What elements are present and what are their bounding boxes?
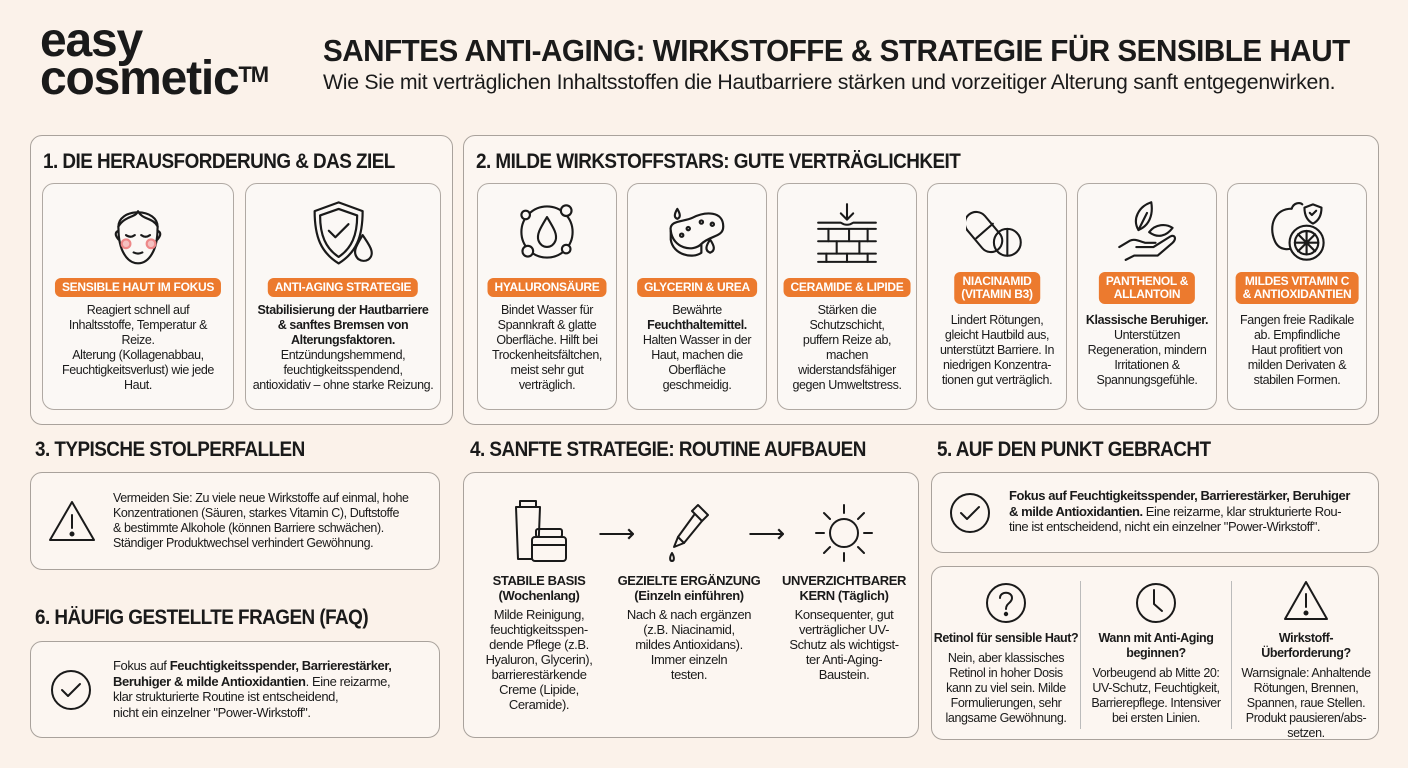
text: [253, 303, 433, 392]
step 1: Hyaluron, Glycerin),: [486, 652, 592, 667]
text: Alterungsfaktoren.: [291, 333, 395, 347]
step 2: [618, 504, 760, 682]
panel: wirkstoffstars: [463, 135, 1379, 425]
text: [1240, 313, 1354, 387]
text: [1086, 313, 1208, 387]
badge: SENSIBLE HAUT IM FOKUS: [62, 280, 214, 294]
faq 3: Rötungen, Brennen,: [1254, 681, 1358, 695]
faq 3: Warnsignale: Anhaltende: [1241, 666, 1371, 680]
faq 2: beginnen?: [1126, 646, 1186, 660]
card: hyaluronsäure: [477, 183, 617, 410]
heading 1: 1. DIE HERAUSFORDERUNG & DAS ZIEL: [43, 150, 395, 173]
icon: hand with leaf: [1118, 201, 1176, 261]
text: Lindert Rötungen,: [951, 313, 1043, 327]
text: Fokus auf Feuchtigkeitsspender, Barrierestärker,: [113, 658, 392, 673]
text: meist sehr gut: [511, 363, 583, 377]
faq 3: [1241, 581, 1371, 740]
faq 1: Retinol in hoher Dosis: [949, 666, 1063, 680]
text: Bindet Wasser für: [501, 303, 593, 317]
panel: faq summary: [30, 641, 440, 738]
text: & bestimmte Alkohole (können Barriere schwächen).: [113, 521, 384, 535]
text: [643, 303, 752, 392]
text: tine ist entscheidend, nicht ein einzelner "Power-Wirkstoff".: [1009, 519, 1320, 534]
text: verträglich.: [519, 378, 575, 392]
faq 2: Wann mit Anti-Aging: [1098, 631, 1214, 645]
step 3: Baustein.: [819, 667, 869, 682]
faq 1: Formulierungen, sehr: [951, 696, 1061, 710]
panel: summary: [931, 472, 1379, 553]
title: SANFTES ANTI-AGING: WIRKSTOFFE & STRATEGIE FÜR SENSIBLE HAUT: [323, 33, 1350, 68]
text: Stärken die: [818, 303, 876, 317]
panel: routine: [463, 472, 919, 738]
badge: (VITAMIN B3): [961, 287, 1033, 301]
subtitle: Wie Sie mit verträglichen Inhaltsstoffen die Hautbarriere stärken und vorzeitiger Alterung sanft entgegenwirken.: [323, 70, 1335, 94]
icon: dropper: [669, 504, 709, 562]
text: widerstandsfähiger: [798, 363, 896, 377]
text: Fokus auf Feuchtigkeitsspender, Barrierestärker, Beruhiger: [1009, 488, 1350, 503]
text: & sanftes Bremsen von: [278, 318, 408, 332]
step 2: mildes Antioxidans).: [635, 637, 743, 652]
icon: pills: [966, 210, 1022, 257]
text: machen: [826, 348, 868, 362]
text: Haut, machen die: [651, 348, 743, 362]
text: puffern Reize ab,: [803, 333, 891, 347]
text: Entzündungshemmend,: [281, 348, 405, 362]
faq 3: Wirkstoff-: [1279, 631, 1333, 645]
faq 3: Produkt pausieren/abs-: [1246, 711, 1366, 725]
text: Stabilisierung der Hautbarriere: [258, 303, 428, 317]
text: [493, 573, 586, 603]
text: GEZIELTE ERGÄNZUNG: [618, 573, 760, 588]
heading 4: 4. SANFTE STRATEGIE: ROUTINE AUFBAUEN: [470, 438, 866, 461]
heading 6: 6. HÄUFIG GESTELLTE FRAGEN (FAQ): [35, 606, 368, 629]
step 1: [486, 500, 592, 712]
icon: check circle: [51, 670, 91, 710]
text: stabilen Formen.: [1254, 373, 1340, 387]
step 3: [782, 504, 906, 682]
icon: warning: [1284, 581, 1328, 620]
step 3: Konsequenter, gut: [795, 607, 893, 622]
text: nicht ein einzelner "Power-Wirkstoff".: [113, 704, 311, 720]
icon: molecule drop: [520, 204, 574, 259]
heading 2: 2. MILDE WIRKSTOFFSTARS: GUTE VERTRÄGLICHKEIT: [476, 150, 960, 173]
text: Haut profitiert von: [1251, 343, 1343, 357]
faq 1: Retinol für sensible Haut?: [934, 631, 1078, 645]
text: tionen gut verträglich.: [942, 373, 1052, 387]
text: [113, 658, 392, 720]
step 3: ter Anti-Aging-: [806, 652, 882, 667]
faq 1: [934, 583, 1078, 725]
step 2: Immer einzeln: [651, 652, 727, 667]
text: Oberfläche: [668, 363, 726, 377]
text: Feuchthaltemittel.: [647, 318, 747, 332]
heading 5: 5. AUF DEN PUNKT GEBRACHT: [937, 438, 1211, 461]
icon: sponge: [669, 208, 724, 257]
badge: PANTHENOL &: [1106, 274, 1188, 288]
badge: NIACINAMID: [962, 274, 1031, 288]
badge: ANTI-AGING STRATEGIE: [275, 280, 411, 294]
faq 2: Vorbeugend ab Mitte 20:: [1092, 666, 1220, 680]
text: Vermeiden Sie: Zu viele neue Wirkstoffe auf einmal, hohe: [113, 491, 409, 505]
text: Alterung (Kollagenabbau,: [72, 348, 204, 362]
step 1: Creme (Lipide,: [499, 682, 579, 697]
step 1: feuchtigkeitsspen-: [490, 622, 588, 637]
badge: [268, 278, 418, 297]
text: Ständiger Produktwechsel verhindert Gewöhnung.: [113, 536, 373, 550]
arrow: ⟶: [748, 518, 785, 548]
text: Fangen freie Radikale: [1240, 313, 1354, 327]
badge: [637, 278, 757, 297]
panel: stolperfallen: [30, 472, 440, 570]
icon: warning: [49, 501, 95, 541]
text: niedrigen Konzentra-: [943, 358, 1051, 372]
step 2: (z.B. Niacinamid,: [643, 622, 735, 637]
card: anti-aging strategie: [245, 183, 441, 410]
text: [792, 303, 902, 392]
step 2: testen.: [671, 667, 707, 682]
text: klar strukturierte Routine ist entscheidend,: [113, 689, 338, 704]
text: [1009, 488, 1350, 534]
badge: [1236, 272, 1358, 304]
faq 3: setzen.: [1287, 726, 1325, 740]
faq 1: langsame Gewöhnung.: [946, 711, 1066, 725]
step 3: Schutz als wichtigst-: [789, 637, 899, 652]
text: Inhaltsstoffe, Temperatur &: [69, 318, 207, 332]
text: gleicht Hautbild aus,: [945, 328, 1049, 342]
arrow: ⟶: [598, 518, 635, 548]
faq 2: bei ersten Linien.: [1112, 711, 1200, 725]
text: [618, 573, 760, 603]
text: UNVERZICHTBARER: [782, 573, 906, 588]
step 1: barrierestärkende: [491, 667, 587, 682]
text: Reize.: [121, 333, 155, 347]
badge: [784, 278, 910, 297]
text: Konzentrationen (Säuren, starkes Vitamin C), Duftstoffe: [113, 506, 399, 520]
card: glycerin & urea: [627, 183, 767, 410]
text: Schutzschicht,: [810, 318, 884, 332]
text: STABILE BASIS: [493, 573, 585, 588]
badge: [487, 278, 607, 297]
text: (Wochenlang): [499, 588, 579, 603]
card: niacinamid: [927, 183, 1067, 410]
text: Spannungsgefühle.: [1097, 373, 1197, 387]
icon: clock: [1136, 583, 1176, 623]
faq 2: [1091, 583, 1221, 725]
panel: faq: [931, 566, 1379, 740]
badge: HYALURONSÄURE: [494, 280, 600, 294]
card: panthenol: [1077, 183, 1217, 410]
text: & milde Antioxidantien. Eine reizarme, klar strukturierte Rou-: [1009, 504, 1341, 518]
step 2: Nach & nach ergänzen: [627, 607, 751, 622]
text: geschmeidig.: [663, 378, 731, 392]
card: vitamin c: [1227, 183, 1367, 410]
icon: question: [986, 583, 1026, 623]
icon: check circle: [950, 493, 990, 533]
logo: easy: [40, 14, 142, 67]
faq 2: UV-Schutz, Feuchtigkeit,: [1092, 681, 1220, 695]
text: Unterstützen: [1114, 328, 1180, 342]
panel: challenge and goal: [30, 135, 453, 425]
text: milden Derivaten &: [1248, 358, 1346, 372]
heading 3: 3. TYPISCHE STOLPERFALLEN: [35, 438, 305, 461]
text: Haut.: [124, 378, 152, 392]
text: [782, 573, 906, 603]
faq 2: Barrierepflege. Intensiver: [1091, 696, 1221, 710]
text: Halten Wasser in der: [643, 333, 751, 347]
text: [113, 491, 409, 550]
text: Feuchtigkeitsverlust) wie jede: [62, 363, 214, 377]
text: antioxidativ – ohne starke Reizung.: [253, 378, 433, 392]
step 3: verträglicher UV-: [799, 622, 889, 637]
text: Trockenheitsfältchen,: [492, 348, 602, 362]
text: Irritationen &: [1114, 358, 1180, 372]
faq 3: Spannen, raue Stellen.: [1247, 696, 1365, 710]
badge: & ANTIOXIDANTIEN: [1243, 287, 1351, 301]
step 1: dende Pflege (z.B.: [489, 637, 589, 652]
text: Regeneration, mindern: [1088, 343, 1206, 357]
text: [62, 303, 214, 392]
faq 3: Überforderung?: [1261, 646, 1351, 660]
text: Reagiert schnell auf: [87, 303, 189, 317]
text: unterstützt Barriere. In: [940, 343, 1054, 357]
badge: GLYCERIN & UREA: [644, 280, 750, 294]
badge: CERAMIDE & LIPIDE: [791, 280, 903, 294]
card: sensible haut: [42, 183, 234, 410]
logo: cosmeticTM: [40, 52, 268, 105]
icon: citrus with shield: [1271, 202, 1325, 261]
badge: [954, 272, 1040, 304]
logo: [40, 14, 268, 105]
text: ab. Empfindliche: [1254, 328, 1340, 342]
badge: ALLANTOIN: [1114, 287, 1180, 301]
icon: shield with drop: [314, 201, 373, 264]
badge: [55, 278, 221, 297]
text: (Einzeln einführen): [634, 588, 744, 603]
faq 1: kann zu viel sein. Milde: [946, 681, 1066, 695]
text: Bewährte: [672, 303, 722, 317]
badge: MILDES VITAMIN C: [1245, 274, 1349, 288]
text: gegen Umweltstress.: [792, 378, 902, 392]
text: KERN (Täglich): [799, 588, 888, 603]
text: Oberfläche. Hilft bei: [496, 333, 598, 347]
text: [940, 313, 1054, 387]
text: [492, 303, 602, 392]
text: Beruhiger & milde Antioxidantien. Eine reizarme,: [113, 674, 390, 688]
badge: [1099, 272, 1195, 304]
text: Klassische Beruhiger.: [1086, 313, 1208, 327]
step 1: Milde Reinigung,: [494, 607, 584, 622]
text: feuchtigkeitsspendend,: [283, 363, 403, 377]
icon: face: [114, 210, 162, 264]
icon: sun: [815, 504, 873, 562]
faq 1: Nein, aber klassisches: [948, 651, 1064, 665]
text: Spannkraft & glatte: [498, 318, 596, 332]
icon: tube and jar: [515, 500, 567, 562]
card: ceramide: [777, 183, 917, 410]
icon: brick wall: [817, 203, 877, 263]
step 1: Ceramide).: [509, 697, 569, 712]
